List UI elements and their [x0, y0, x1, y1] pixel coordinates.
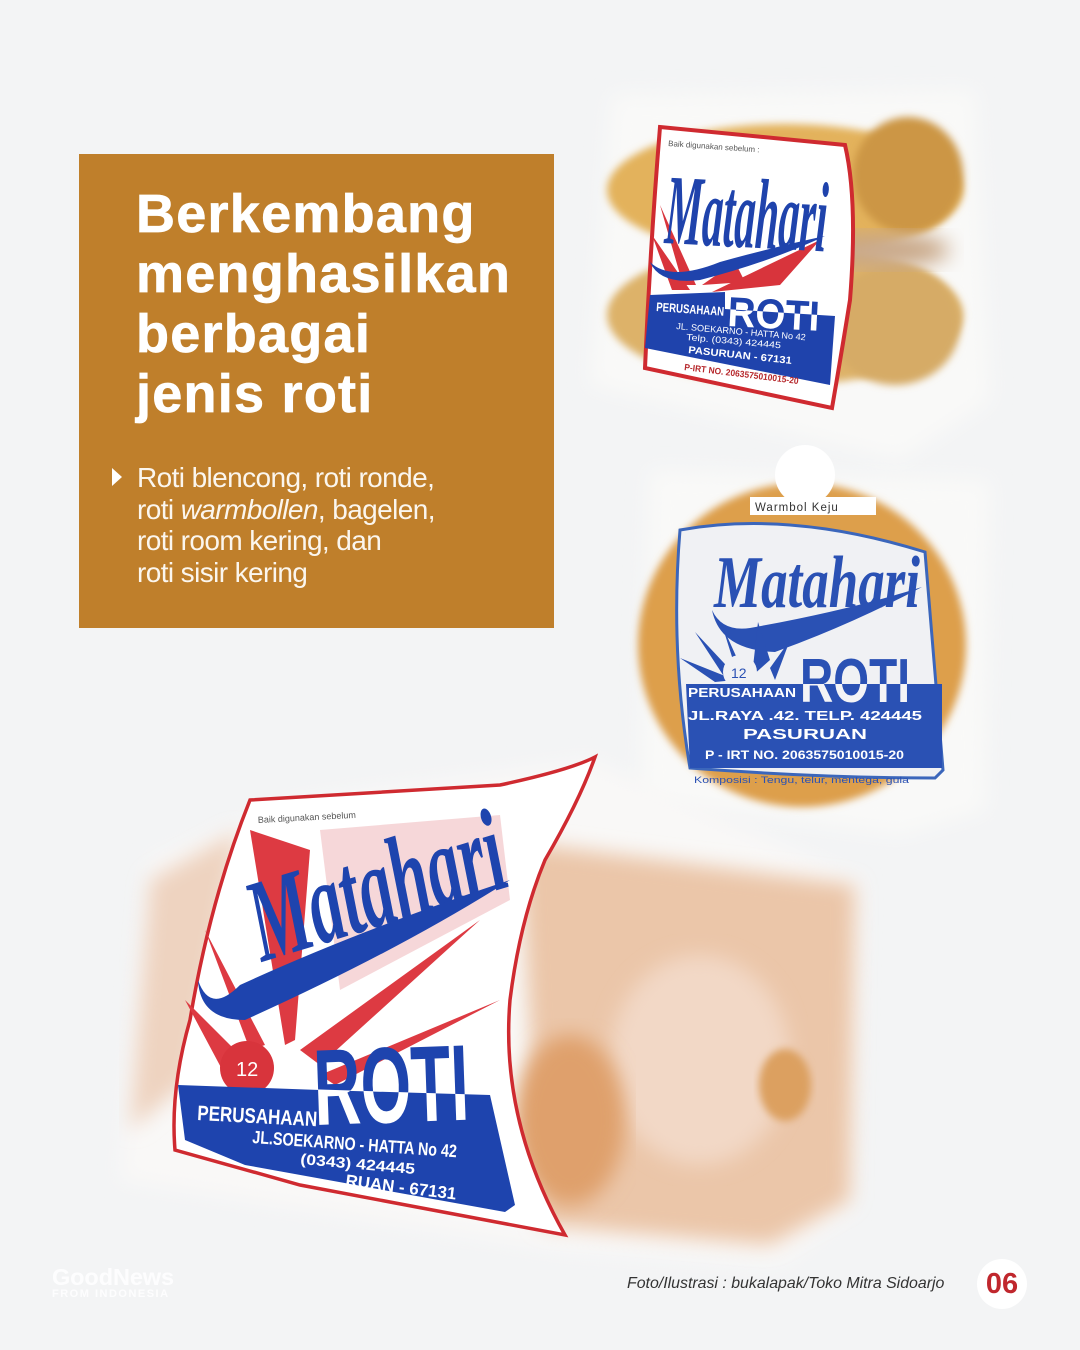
photo: large bread pack: RUAN - 67131	[345, 1171, 457, 1204]
photo: middle bread pack: ROTI	[800, 647, 910, 716]
photo: middle bread pack: PERUSAHAAN	[688, 685, 796, 700]
page number	[977, 1259, 1027, 1309]
photo: top bread pack: P-IRT NO. 2063575010015-20	[684, 362, 799, 386]
photo: top bread pack: Matahari	[662, 154, 831, 273]
logo: GoodNews from Indonesia: FROM INDONESIA	[52, 1288, 170, 1300]
photo: middle bread pack: PASURUAN	[743, 726, 867, 743]
photo: large bread pack: PERUSAHAAN	[197, 1102, 318, 1131]
heading: menghasilkan	[136, 244, 511, 304]
page number: 06	[986, 1268, 1018, 1300]
heading: Berkembang	[136, 184, 476, 244]
photo: large bread pack	[120, 757, 860, 1265]
photo: large bread pack: JL.SOEKARNO - HATTA No 42	[252, 1127, 458, 1161]
photo: top bread pack: PERUSAHAAN	[656, 300, 725, 319]
photo: top bread pack: ROTI	[727, 288, 821, 340]
photo: top bread pack: PASURUAN - 67131	[688, 345, 793, 367]
icon: bullet arrow	[112, 468, 122, 486]
text block: bread types: roti room kering, dan	[137, 525, 381, 556]
photo: middle bread pack: ROTI	[800, 647, 910, 716]
photo: top bread pack: Baik digunakan sebelum :	[668, 139, 760, 154]
photo: middle bread pack	[638, 445, 990, 835]
photo credit: Foto/Ilustrasi : bukalapak/Toko Mitra Sidoarjo	[627, 1275, 944, 1292]
heading: jenis roti	[136, 364, 374, 424]
photo: middle bread pack: Warmbol Keju	[755, 502, 839, 514]
photo: large bread pack: 12	[236, 1059, 258, 1081]
photo: large bread pack: (0343) 424445	[300, 1151, 416, 1178]
photo: top bread pack: ROTI	[727, 288, 821, 340]
text block: bread types: roti warmbollen, bagelen,	[137, 494, 435, 524]
photo: large bread pack: Baik digunakan sebelum	[258, 810, 356, 825]
photo: top bread pack: JL. SOEKARNO - HATTA No 42	[676, 321, 806, 342]
text block: bread types	[137, 462, 435, 588]
logo: GoodNews from Indonesia: GoodNews	[52, 1264, 174, 1290]
photo: middle bread pack: JL.RAYA .42. TELP. 424445	[688, 708, 922, 723]
product photographs	[122, 112, 972, 1256]
photo: large bread pack: Matahari	[230, 785, 520, 987]
photo: middle bread pack: Komposisi : Tengu, telur, mentega, gula	[694, 775, 910, 786]
panel: title and description	[79, 154, 554, 628]
text block: bread types: Roti blencong, roti ronde,	[137, 462, 434, 493]
photo: top bread pack: Telp. (0343) 424445	[686, 332, 781, 350]
text block: bread types: roti sisir kering	[137, 556, 307, 588]
photo: middle bread pack: Matahari	[713, 542, 920, 624]
heading: berbagai	[136, 304, 371, 364]
photo: middle bread pack: 12	[731, 665, 747, 681]
photo: large bread pack: ROTI	[312, 1022, 471, 1148]
heading	[134, 184, 511, 424]
photo: middle bread pack: P - IRT NO. 2063575010015-20	[705, 748, 904, 762]
photo: top bread pack	[602, 112, 970, 410]
photo: large bread pack: ROTI	[312, 1022, 471, 1148]
